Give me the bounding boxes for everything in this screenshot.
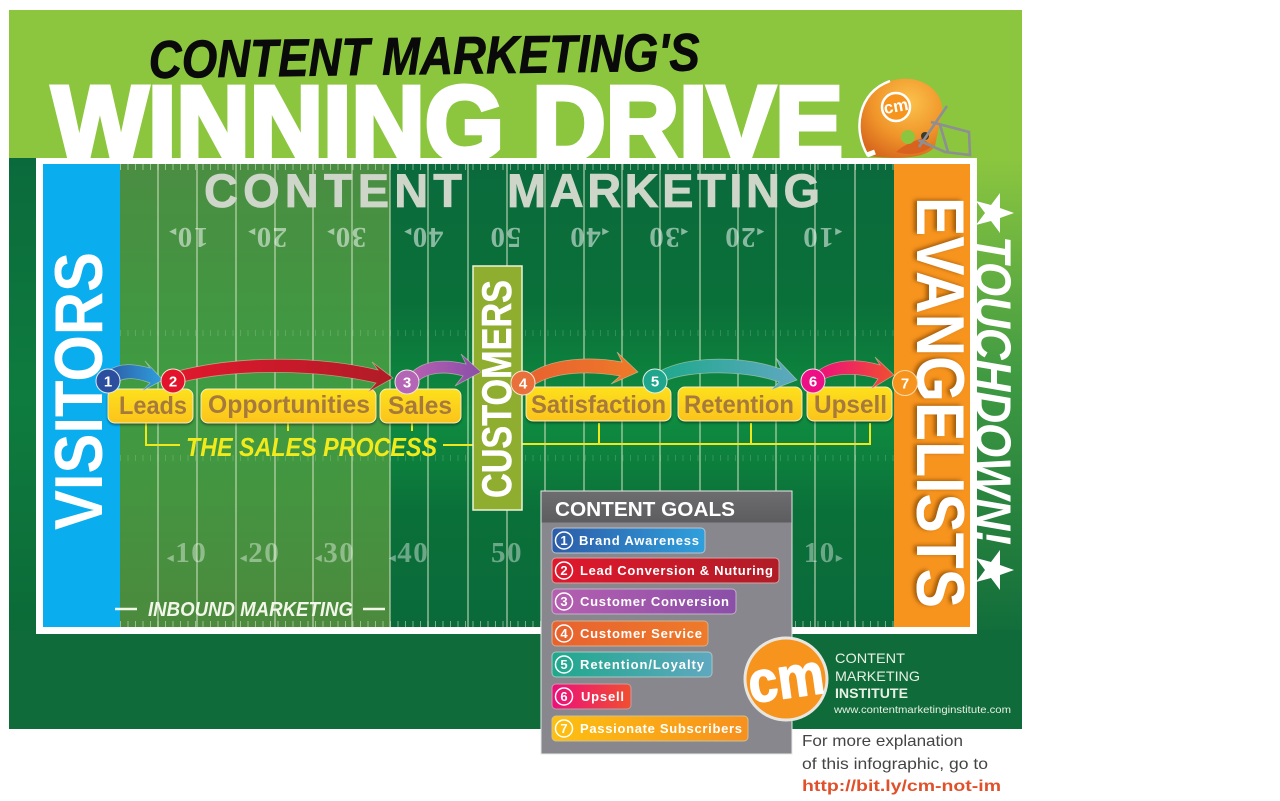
goal 5: Retention/Loyalty bbox=[580, 657, 705, 672]
goal 7: 7 bbox=[560, 721, 568, 736]
heading: content goals: CONTENT GOALS bbox=[555, 499, 735, 521]
sales process bracket bbox=[146, 423, 870, 462]
goal 6: 6 bbox=[560, 689, 568, 704]
arrow 4 to 5 bbox=[528, 352, 638, 386]
goal 1 bbox=[552, 528, 705, 553]
goal 5 bbox=[552, 652, 712, 677]
numbered markers bbox=[96, 369, 918, 396]
yard numbers top row: ◂40 bbox=[569, 221, 609, 253]
box: opportunities: Opportunities bbox=[208, 391, 370, 419]
footnote text bbox=[802, 733, 1001, 795]
goal 4: Customer Service bbox=[580, 626, 702, 641]
yard numbers top row: ◂20 bbox=[724, 221, 764, 253]
title: winning drive: WINNING DRIVE bbox=[52, 65, 843, 183]
helmet icon: cm bbox=[882, 95, 910, 118]
goal 1: 1 bbox=[560, 533, 568, 548]
marker 7: 7 bbox=[901, 376, 909, 392]
yard numbers bottom row bbox=[167, 537, 844, 569]
marker 7 bbox=[892, 370, 918, 396]
stage boxes bbox=[108, 387, 892, 423]
goal 3: Customer Conversion bbox=[580, 594, 729, 609]
field heading: content marketing: MARKETING bbox=[507, 164, 820, 217]
box: upsell: Upsell bbox=[814, 391, 887, 419]
arrow 3 to customers bbox=[412, 354, 481, 386]
marker 6 bbox=[801, 369, 825, 393]
box: sales: Sales bbox=[388, 392, 452, 420]
marker 5: 5 bbox=[651, 374, 659, 390]
yard numbers top row: ◂30 bbox=[648, 221, 688, 253]
yard numbers top row: 40▸ bbox=[403, 221, 443, 253]
yard numbers top row bbox=[168, 221, 842, 253]
marker 4 bbox=[511, 371, 535, 395]
arrow 6 to 7 bbox=[818, 357, 894, 389]
content marketing institute logo: cm bbox=[744, 641, 828, 716]
goal 2: Lead Conversion & Nuturing bbox=[580, 563, 773, 578]
arrow 5 to 6 bbox=[660, 358, 797, 390]
yard numbers bottom row: 10▸ bbox=[804, 537, 844, 569]
marker 6: 6 bbox=[809, 374, 817, 390]
arrow 1 to 2 bbox=[108, 361, 163, 391]
box: satisfaction: Satisfaction bbox=[531, 391, 666, 419]
end zone: visitors: VISITORS bbox=[41, 252, 117, 530]
end zone: evangelists: EVANGELISTS bbox=[902, 197, 978, 608]
box: sales bbox=[380, 389, 461, 423]
marker 2 bbox=[161, 369, 185, 393]
goal 7 bbox=[552, 716, 748, 741]
footnote text: of this infographic, go to bbox=[802, 756, 988, 773]
marker 3: 3 bbox=[403, 374, 411, 392]
field heading: content marketing bbox=[204, 164, 820, 217]
goal 2: 2 bbox=[560, 563, 568, 578]
goal 1: Brand Awareness bbox=[579, 533, 699, 548]
arrow 2 to 3 bbox=[178, 359, 393, 392]
institute name: MARKETING bbox=[835, 668, 920, 684]
yard numbers bottom row: 50 bbox=[491, 537, 523, 569]
sales process bracket: THE SALES PROCESS bbox=[186, 432, 438, 462]
yard numbers bottom row: ◂30 bbox=[315, 537, 355, 569]
marker 5 bbox=[643, 369, 667, 393]
green background panel bbox=[9, 10, 1022, 729]
institute name bbox=[833, 650, 1011, 716]
yard numbers top row: 30▸ bbox=[326, 221, 366, 253]
goal 4: 4 bbox=[560, 626, 568, 641]
institute name: INSTITUTE bbox=[835, 685, 908, 701]
institute name: www.contentmarketinginstitute.com bbox=[833, 704, 1011, 716]
marker 1 bbox=[96, 369, 120, 393]
yard numbers top row: 50 bbox=[489, 221, 521, 253]
goal 7: Passionate Subscribers bbox=[580, 721, 742, 736]
customers midfield box: CUSTOMERS bbox=[473, 280, 520, 498]
goal 3: 3 bbox=[560, 594, 568, 609]
institute name: CONTENT bbox=[835, 650, 905, 666]
yard numbers bottom row: ◂40 bbox=[389, 537, 429, 569]
goal 2 bbox=[552, 558, 779, 583]
footnote text: http://bit.ly/cm-not-im bbox=[802, 778, 1001, 795]
goal 6: Upsell bbox=[581, 689, 624, 704]
yard numbers bottom row: ◂20 bbox=[240, 537, 280, 569]
marker 2: 2 bbox=[169, 374, 177, 390]
touchdown label with stars: TOUCHDOWN! bbox=[965, 236, 1021, 545]
marker 4: 4 bbox=[519, 376, 528, 392]
yard numbers top row: ◂10 bbox=[802, 221, 842, 253]
box: leads: Leads bbox=[119, 392, 187, 420]
box: retention: Retention bbox=[684, 391, 794, 419]
footnote text: For more explanation bbox=[802, 733, 963, 750]
goal 6 bbox=[552, 684, 631, 709]
field heading: content marketing: CONTENT bbox=[204, 164, 462, 217]
panel: content goals bbox=[541, 491, 792, 754]
goal 4 bbox=[552, 621, 708, 646]
end zone: visitors bbox=[41, 164, 120, 627]
helmet icon bbox=[859, 79, 970, 158]
marker 3 bbox=[395, 370, 419, 394]
inbound marketing label: INBOUND MARKETING bbox=[148, 599, 353, 621]
yard numbers top row: 20▸ bbox=[247, 221, 287, 253]
goal 3 bbox=[552, 589, 736, 614]
heading: content goals bbox=[542, 492, 792, 522]
goal 5: 5 bbox=[560, 657, 568, 672]
yard numbers top row: 10▸ bbox=[168, 221, 208, 253]
yard numbers bottom row: ◂10 bbox=[167, 537, 207, 569]
marker 1: 1 bbox=[104, 374, 112, 390]
football field bbox=[36, 158, 977, 634]
funnel arrows bbox=[108, 352, 894, 392]
title: content marketing's: CONTENT MARKETING'S bbox=[148, 23, 700, 90]
